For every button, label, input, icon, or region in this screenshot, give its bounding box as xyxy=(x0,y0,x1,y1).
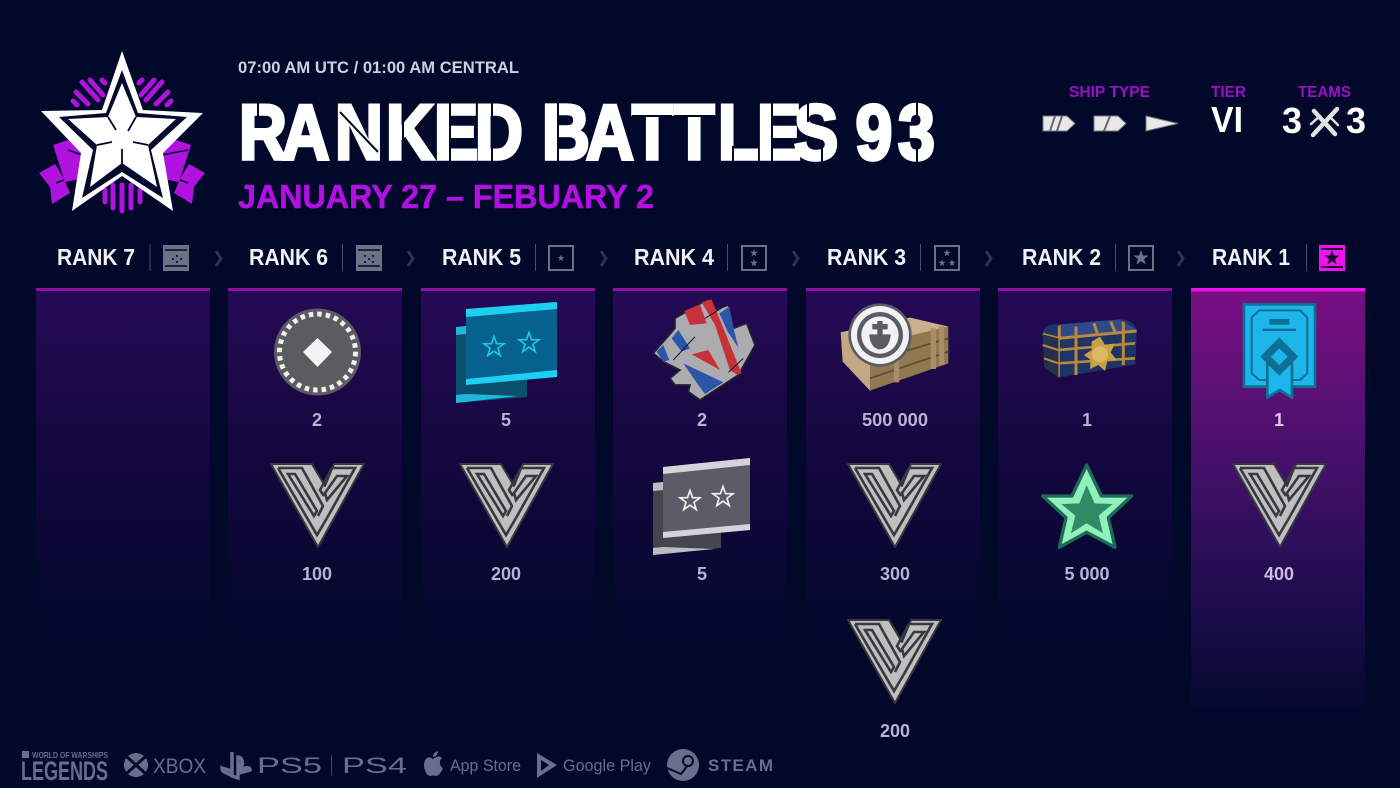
footer platforms xyxy=(21,749,773,786)
rank 3 icon xyxy=(935,246,959,270)
legends logo: LEGENDS xyxy=(21,756,108,786)
steam xyxy=(667,749,773,781)
reward: V points xyxy=(848,620,941,703)
teams: 3 xyxy=(1282,100,1302,141)
teams: TEAMS xyxy=(1298,84,1351,101)
playstation 5 and 4 xyxy=(222,752,407,778)
rank 5 icon xyxy=(549,246,573,270)
google play xyxy=(537,753,651,778)
icon: destroyer class xyxy=(1043,116,1075,131)
rank 6 label: RANK 6 xyxy=(249,244,328,270)
reward: gold chest xyxy=(1043,319,1137,378)
teams: 3 xyxy=(1346,100,1366,141)
reward: green star xyxy=(1043,465,1132,547)
logo: ranked star emblem xyxy=(39,51,205,211)
reward: blue signal flags xyxy=(456,302,557,403)
value: 200 xyxy=(880,721,910,741)
value: 1 xyxy=(1082,410,1092,430)
rank 2 icon xyxy=(1129,246,1153,270)
arrow xyxy=(1178,251,1183,266)
rank 1 icon xyxy=(1319,245,1345,271)
icon: crossed swords xyxy=(1311,109,1338,135)
rank 1 column xyxy=(1191,244,1365,724)
value: 2 xyxy=(697,410,707,430)
icon: battleship class xyxy=(1146,116,1178,131)
value: 5 xyxy=(501,410,511,430)
app store xyxy=(424,751,521,776)
value: 400 xyxy=(1264,564,1294,584)
playstation 5 and 4: PS4 xyxy=(342,753,407,778)
arrow xyxy=(986,251,991,266)
rank 2 label: RANK 2 xyxy=(1022,244,1101,270)
tier: VI xyxy=(1211,99,1243,140)
tier: TIER xyxy=(1211,84,1246,101)
ship type info xyxy=(1043,84,1178,131)
arrow xyxy=(408,251,413,266)
title: RANKED BATTLES 93 xyxy=(239,89,935,176)
playstation 5 and 4: PS5 xyxy=(257,753,322,778)
reward: blue certificate xyxy=(1244,304,1315,398)
legends logo: WORLD OF WARSHIPS xyxy=(32,750,108,760)
arrow xyxy=(793,251,798,266)
steam: STEAM xyxy=(708,756,773,775)
rank 4 column xyxy=(613,244,787,648)
rank 7 column xyxy=(36,244,210,648)
icon: cruiser class xyxy=(1094,116,1126,131)
rank 4 label: RANK 4 xyxy=(634,244,714,270)
value: 300 xyxy=(880,564,910,584)
reward: grey signal flags xyxy=(653,458,750,555)
reward: camouflage patch xyxy=(653,299,755,400)
rank 5 label: RANK 5 xyxy=(442,244,521,270)
value: 5 xyxy=(697,564,707,584)
rank 2 column xyxy=(998,244,1172,648)
rank 6 column xyxy=(228,244,402,648)
reward: ranked token xyxy=(274,308,361,396)
rank 4 icon xyxy=(742,246,766,270)
reward: V points xyxy=(460,464,553,547)
value: 2 xyxy=(312,410,322,430)
rank 7 label: RANK 7 xyxy=(57,244,135,270)
teams xyxy=(1282,84,1366,141)
legends logo xyxy=(21,750,108,786)
ship type label: SHIP TYPE xyxy=(1069,84,1150,101)
date: JANUARY 27 – FEBUARY 2 xyxy=(238,178,654,215)
value: 500 000 xyxy=(862,410,928,430)
google play: Google Play xyxy=(563,756,651,775)
xbox xyxy=(124,753,206,778)
arrow xyxy=(601,251,606,266)
reward: V points xyxy=(848,464,941,547)
value: 200 xyxy=(491,564,521,584)
time line: 07:00 AM UTC / 01:00 AM CENTRAL xyxy=(238,59,519,77)
rank 1 label: RANK 1 xyxy=(1212,244,1290,270)
reward: V points xyxy=(271,464,364,547)
reward: V points xyxy=(1233,464,1326,547)
rank 7 icon xyxy=(163,245,189,271)
reward: credits crate xyxy=(841,303,948,391)
value: 5 000 xyxy=(1064,564,1110,584)
app store: App Store xyxy=(450,756,521,775)
value: 100 xyxy=(302,564,332,584)
value: 1 xyxy=(1274,410,1284,430)
rank 3 column xyxy=(806,244,980,741)
rank 3 label: RANK 3 xyxy=(827,244,906,270)
rank 5 column xyxy=(421,244,595,648)
xbox: XBOX xyxy=(153,755,206,778)
arrow xyxy=(216,251,221,266)
rank 6 icon xyxy=(356,245,382,271)
